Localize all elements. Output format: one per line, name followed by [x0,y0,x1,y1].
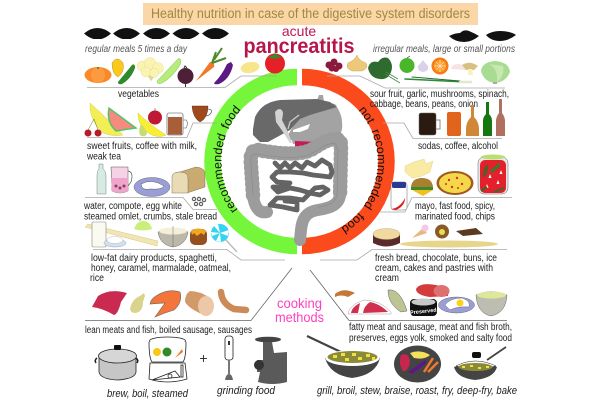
icon: preserved can: Preserved [410,308,437,316]
gap under liver [293,124,310,132]
icon: marinated jar [478,154,508,194]
heading: cooking methods: cooking [277,295,322,311]
title banner: Healthy nutrition in case of the digestive system disorders [151,6,470,21]
divider: mayo leader [380,198,512,212]
text: regular meals: regular meals 5 times a day [85,44,188,55]
pancreas [295,141,318,148]
icon: lollipop [211,224,237,252]
icon: frying pan with vegetables [307,336,380,378]
ring: recommended food [204,68,297,254]
label: grill, broil, stew: grill, broil, stew, braise, roast, fry, deep-fry, bake [317,385,517,397]
icon: honey pot [190,228,207,245]
label: vegetables: vegetables [118,89,159,100]
icon: second banana [138,113,166,136]
stomach [288,95,342,144]
label: fresh bread: fresh bread, chocolate, buns, ice [375,253,497,264]
icon: sausage [221,292,246,310]
icon: baguette [400,240,498,248]
ring: not recommended food [302,68,395,254]
icon: orange bottle [466,105,479,136]
icon: green bottle [483,102,492,136]
icon: compote pitcher [111,167,132,193]
icon: poultry [130,293,145,313]
divider: fruit leader [87,123,217,138]
gap under stomach [275,140,294,148]
icon: hand blender [225,336,233,380]
divider: pastries leader [320,250,507,260]
divider: lean meat leader [85,268,292,320]
label: water and omelet: steamed omlet, crumbs, stale bread [84,212,217,222]
icon: cottage cheese [104,236,126,247]
sodas, coffee, alcohol row [383,99,505,152]
icon: spaghetti [85,224,158,246]
icon: plate with omelet [134,178,170,196]
divider: water leader [85,198,217,210]
water and egg white row [83,164,217,222]
icon: mushrooms [451,63,478,75]
heading: acute pancreatitis: pancreatitis [244,35,354,58]
icon: chips [405,159,433,178]
label: dairy products: rice [90,273,104,284]
icon: orange [432,58,448,74]
dairy and carbohydrates row [85,221,285,284]
icon: cauliflower [137,58,164,81]
divider: vegetables leader [87,76,277,88]
heading: cooking methods [275,295,324,325]
icon: cabbage [481,61,510,84]
icon: pear [139,124,147,136]
icon: milk glass [92,222,106,247]
icon: regular meal bowls [84,28,229,39]
label: grinding food: grinding food [217,385,276,397]
icon: crumbs [192,197,206,206]
icon: pot [95,345,138,380]
label: mayo [415,201,495,222]
heading: cooking methods: methods [275,309,324,325]
label: mayo: marinated food, chips [415,212,495,222]
label: sodas: sodas, coffee, alcohol [418,141,498,152]
icon: cherries [84,119,102,136]
icon: cucumber [118,64,135,84]
icon: salami [416,284,450,297]
heading: acute pancreatitis: acute [282,23,316,39]
fatty meat row [310,270,512,344]
heading: acute pancreatitis [244,23,354,58]
icon: coffee mug [419,113,440,135]
icon: watermelon [108,108,136,131]
ring: recommended food: recommended food [213,104,240,213]
icon: steamer [149,337,187,382]
icon: bowl of oatmeal [158,226,188,247]
label: water and omelet [83,201,217,222]
icon: bowl of broth [476,292,507,316]
icon: garlic [418,60,428,72]
sweet fruits and drinks row [84,103,217,162]
large intestine [251,139,341,240]
divider: fatty meat leader [310,270,507,320]
icon: preserved can [410,298,437,316]
label: sour fruit [370,89,509,110]
label: sour fruit: sour fruit, garlic, mushrooms, spinach, [370,89,509,100]
icon: cake [373,228,400,246]
icon: onion [347,55,367,71]
label: sweet fruits: weak tea [86,152,121,162]
icon: grill [394,346,441,382]
mayo and fast food row [380,154,512,222]
icon: yellow pepper [112,59,123,77]
gallbladder and bile duct [275,109,292,143]
icon: beet [178,66,194,87]
icon: jelly [134,221,152,230]
icon: soda can [447,112,461,136]
icon: berries [326,58,342,72]
icon: fish steak [388,290,407,312]
lean meats row [85,268,292,336]
label: mayo: mayo, fast food, spicy, [415,201,495,212]
icon: ice cream [412,224,428,238]
small intestine [270,160,332,210]
label: lean meats: lean meats and fish, boiled sausage, sausages [85,325,252,336]
divider: sour fruit leader [327,76,505,88]
icon: salmon steak [150,291,181,317]
icon: mayo jar with chilli [391,182,407,210]
icon: pizza [436,171,474,195]
icon: green apple [400,56,414,73]
icon: fatty ham [348,300,391,314]
icon: boiled sausage [185,291,214,316]
icon: eggplant [214,62,233,84]
title banner [143,3,478,25]
icon: covered pan [454,347,506,380]
icon: spring onion [405,77,471,82]
text: irregular meals: irregular meals, large or small portions [373,44,515,55]
icon: carrot [196,48,226,81]
label: water and omelet: water, compote, egg white [83,201,182,212]
vegetables row [84,48,285,100]
icon: burger [411,178,433,196]
icon: irregular meal bowls [449,30,516,42]
icon: brown bottle [496,99,505,136]
label: dairy products [90,253,231,284]
icon: potato [240,60,260,75]
sour fruit row [326,55,510,110]
label: sweet fruits: sweet fruits, coffee with milk, [87,141,197,152]
label: dairy products: low-fat dairy products, spaghetti, [91,253,217,264]
icon: zucchini [157,58,181,84]
icon: bun [435,224,449,238]
illustration: digestive system [251,95,342,240]
icon: water bottle [97,164,106,194]
icon: apple [148,108,162,124]
icon: banana [90,103,123,136]
icon: pumpkin [84,67,112,83]
label: fresh bread: cream, cakes and pastries with [375,263,493,274]
label: fatty meat [349,322,512,344]
label: fatty meat: preserves, eggs yolk, smoked and salty food [349,333,512,344]
label: sweet fruits [86,141,197,162]
divider: dairy leader [93,250,285,260]
label: fatty meat: fatty meat and sausage, meat and fish broth, [349,322,512,333]
icon: tomato [265,53,285,74]
fresh bread and pastries row [320,224,507,284]
icon: chocolate [456,228,483,236]
icon: meat grinder [254,337,287,384]
label: fresh bread [375,253,497,284]
ring: not recommended food: not recommended food [341,106,384,235]
icon: egg on plate [438,297,474,313]
icon: bread loaf [172,167,205,193]
icon: glass of coffee with milk [167,113,188,135]
divider: sodas leader [383,123,502,138]
icon: spinach [368,58,400,83]
icon: cup of tea [192,106,212,122]
label: dairy products: honey, caramel, marmalade, oatmeal, [91,263,231,274]
label: fresh bread: cream [375,273,399,284]
icon: sausage slices [335,290,355,297]
label: brew, boil, steamed: brew, boil, steamed [107,388,189,400]
icon: lean meat [92,291,127,315]
liver [253,99,337,142]
label: sour fruit: cabbage, beans, peans, onion [370,99,478,110]
plus sign: + [199,350,208,366]
